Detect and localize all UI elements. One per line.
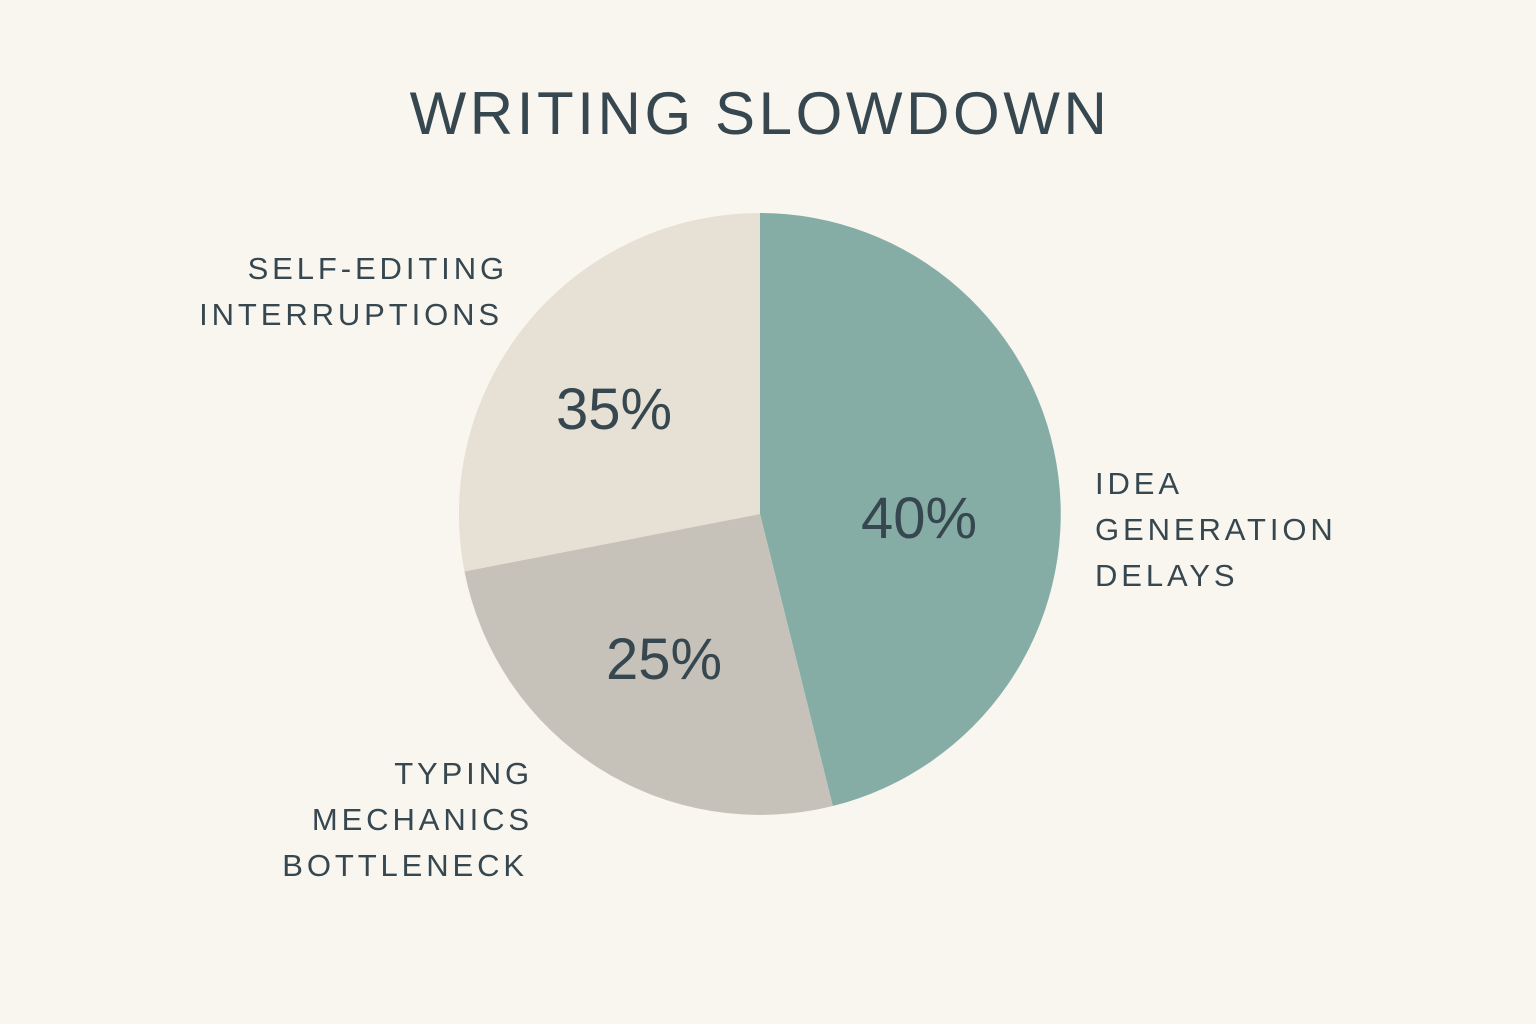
label: typing mechanics bottleneck: TYPING <box>394 756 533 791</box>
label: typing mechanics bottleneck: BOTTLENECK <box>282 848 528 883</box>
label: typing mechanics bottleneck: MECHANICS <box>312 802 533 837</box>
slice: self-editing interruptions 35% <box>459 213 760 571</box>
label: typing mechanics bottleneck <box>282 756 533 883</box>
label: idea generation delays <box>1095 466 1337 593</box>
label: self-editing interruptions: INTERRUPTIONS <box>199 297 503 332</box>
title: WRITING SLOWDOWN <box>410 80 1110 147</box>
label: idea generation delays: DELAYS <box>1095 558 1238 593</box>
label: idea generation delays: GENERATION <box>1095 512 1337 547</box>
value: 35%: 35% <box>556 377 672 442</box>
label: idea generation delays: IDEA <box>1095 466 1183 501</box>
value: 40%: 40% <box>861 486 977 551</box>
label: self-editing interruptions: SELF-EDITING <box>248 251 508 286</box>
value: 25%: 25% <box>606 627 722 692</box>
slice: typing mechanics bottleneck 25% <box>464 514 833 815</box>
pie chart <box>459 213 1061 815</box>
slice: idea generation delays 40% <box>760 213 1061 806</box>
label: self-editing interruptions <box>199 251 508 332</box>
